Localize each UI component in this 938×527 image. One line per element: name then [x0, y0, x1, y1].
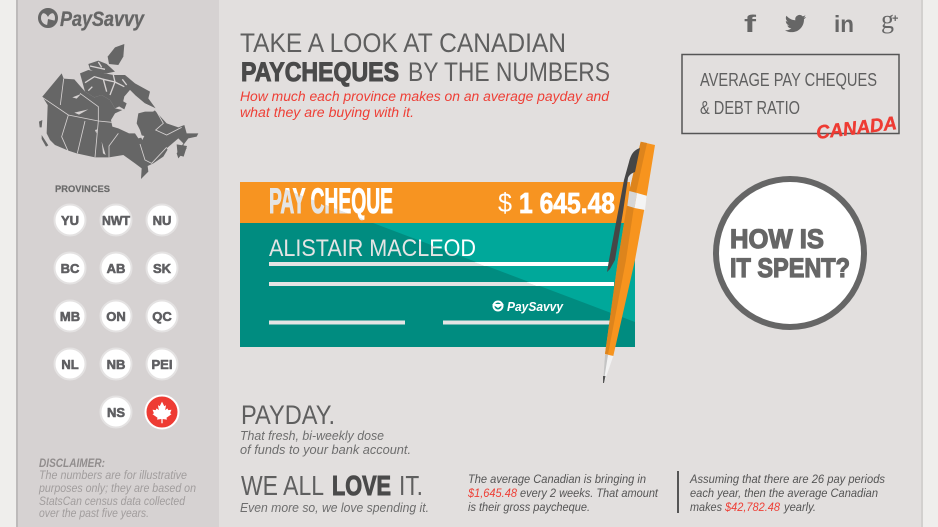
selection box: AVERAGE PAY CHEQUES — [700, 70, 877, 90]
cheque amount: 1 645.48 — [519, 188, 615, 220]
province buttons: NWT — [102, 213, 130, 228]
how is it spent circle — [716, 179, 864, 327]
brand logo: PaySavvy — [60, 8, 145, 31]
payday text block — [240, 400, 411, 457]
yearly income note: yearly. — [783, 500, 816, 514]
we all love it text block — [240, 470, 429, 515]
province buttons: NS — [107, 405, 125, 420]
disclaimer: StatsCan census data collected — [39, 496, 186, 508]
disclaimer: purposes only; they are based on — [38, 483, 196, 495]
gross paycheque note: every 2 weeks. That amount — [520, 486, 659, 500]
yearly income note — [689, 472, 885, 514]
payday text block: PAYDAY. — [241, 400, 335, 430]
disclaimer: The numbers are for illustrative — [39, 470, 187, 482]
province buttons — [54, 204, 178, 428]
we all love it text block: LOVE — [332, 470, 391, 501]
how is it spent circle: HOW IS — [730, 224, 824, 254]
province buttons: QC — [152, 309, 172, 324]
province buttons: NL — [61, 357, 79, 372]
social icons: + — [892, 13, 898, 25]
cheque amount: $ — [498, 188, 512, 218]
yearly income note: makes — [690, 500, 722, 514]
social icons: in — [834, 11, 854, 37]
province buttons: NU — [153, 213, 171, 228]
subtitle: How much each province makes on an average payday and — [240, 89, 609, 104]
social icons — [744, 5, 898, 38]
how is it spent circle: IT SPENT? — [730, 253, 850, 283]
gross paycheque note: The average Canadian is bringing in — [468, 472, 646, 486]
map of Canada — [39, 44, 198, 179]
province buttons: SK — [153, 261, 172, 276]
Canada button with maple leaf — [146, 396, 178, 428]
province buttons: MB — [60, 309, 80, 324]
title: TAKE A LOOK AT CANADIAN — [240, 28, 566, 58]
red label: Canada: CANADA — [815, 113, 898, 144]
subtitle: what they are buying with it. — [240, 105, 414, 120]
pay cheque — [240, 182, 635, 347]
gross paycheque note: is their gross paycheque. — [468, 500, 590, 514]
gross paycheque note — [467, 472, 659, 514]
cheque logo: PaySavvy — [507, 299, 564, 314]
selection box — [682, 54, 899, 144]
title — [240, 28, 610, 87]
subtitle — [240, 89, 609, 120]
social icons: g — [881, 5, 894, 34]
province buttons: BC — [61, 261, 80, 276]
province buttons: YU — [61, 213, 79, 228]
pen — [603, 142, 655, 383]
social icons: f — [744, 11, 758, 38]
yearly income note: $42,782.48 — [724, 500, 780, 514]
province buttons: NB — [107, 357, 125, 372]
disclaimer: DISCLAIMER: — [39, 458, 105, 470]
province buttons: ON — [106, 309, 126, 324]
gross paycheque note: $1,645.48 — [467, 486, 517, 500]
disclaimer: over the past five years. — [39, 508, 149, 520]
disclaimer — [38, 458, 196, 520]
we all love it text block: IT. — [399, 470, 423, 501]
selection box: & DEBT RATIO — [700, 98, 800, 118]
payee name: ALISTAIR MACLEOD — [269, 235, 476, 262]
title: PAYCHEQUES — [241, 57, 399, 87]
cheque heading: PAY CHEQUE — [269, 182, 393, 221]
yearly income note: Assuming that there are 26 pay periods — [689, 472, 885, 486]
payday text block: That fresh, bi-weekly dose — [240, 429, 384, 443]
payday text block: of funds to your bank account. — [240, 443, 411, 457]
title: BY THE NUMBERS — [408, 57, 610, 87]
yearly income note: each year, then the average Canadian — [690, 486, 878, 500]
we all love it text block: Even more so, we love spending it. — [240, 500, 429, 515]
we all love it text block: WE ALL — [241, 470, 324, 501]
province buttons: PEI — [152, 357, 172, 372]
province buttons: AB — [107, 261, 125, 276]
provinces heading: PROVINCES — [55, 184, 110, 195]
